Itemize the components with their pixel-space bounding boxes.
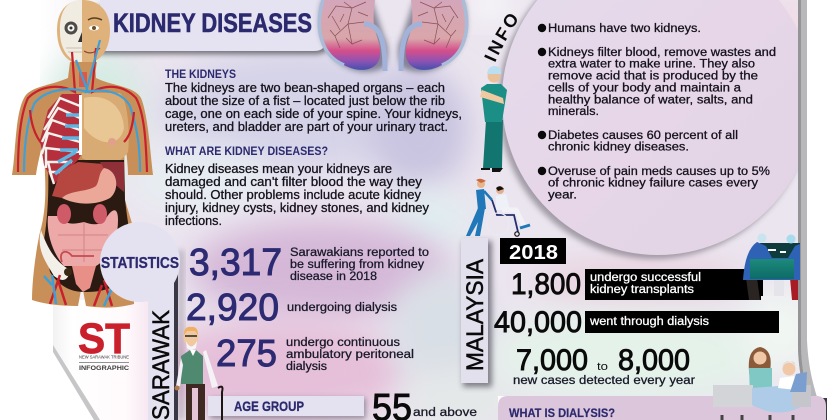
section: the kidneys <box>165 69 462 134</box>
label: sarawak: SARAWAK <box>148 310 175 420</box>
stomach <box>62 168 116 204</box>
section: what are kidney diseases <box>165 146 430 228</box>
stat: 3,317: disease in 2018 <box>290 271 377 283</box>
leg vessels <box>44 275 112 306</box>
icon: nurse with wheelchair <box>466 179 530 236</box>
intestines <box>48 210 118 266</box>
stat: 3,317: 3,317 <box>189 242 282 284</box>
figure: human anatomy body <box>12 0 153 308</box>
stat: 55 and above <box>372 387 477 420</box>
stat: 2,920: 2,920 <box>186 287 279 329</box>
info bullet list: Kidneys filter blood, remove wastes and <box>548 47 776 59</box>
info bullet list: healthy balance of water, salts, and <box>548 94 753 106</box>
stat: 2,920: undergoing dialysis <box>287 302 397 314</box>
stat: 1,800 transplants: 1,800 <box>511 268 581 301</box>
info bullet list <box>538 23 776 202</box>
page edge strip <box>798 0 818 400</box>
info bullet list: cells of your body and maintain a <box>548 82 742 94</box>
section: what are kidney diseases: Kidney diseases mean your kidneys are <box>165 162 392 176</box>
heading: info: O <box>498 9 523 32</box>
pelvis <box>40 230 70 280</box>
panel: malaysia <box>461 238 492 387</box>
heading: info: I <box>480 52 501 65</box>
panel: statistics <box>100 222 184 420</box>
abdomen cavity <box>44 160 130 292</box>
icon: nurse and patient in bed <box>713 347 811 420</box>
stat: 40,000 dialysis: went through dialysis <box>589 316 709 328</box>
stat: 3,317: Sarawakians reported to <box>290 247 429 259</box>
stat: 55 and above: and above <box>413 407 477 419</box>
liver <box>52 162 104 198</box>
title banner <box>98 0 328 54</box>
label: 2018: 2018 <box>509 242 558 264</box>
label: 2018 <box>500 238 566 264</box>
icon: surgeons at operating table <box>743 234 800 300</box>
section: the kidneys: THE KIDNEYS <box>165 69 236 81</box>
section: what are kidney diseases: should. Other problems include acute kidney <box>165 188 422 202</box>
stat: new cases: to <box>597 361 608 373</box>
stat: new cases: 8,000 <box>618 344 690 377</box>
section: the kidneys: The kidneys are two bean-shaped organs – each <box>165 81 445 95</box>
info bullet list: extra water to make urine. They also <box>548 58 755 70</box>
panel: age group <box>208 396 366 419</box>
panel: info circle <box>498 0 814 259</box>
icon: old man with cane <box>174 327 222 420</box>
info bullet list: Diabetes causes 60 percent of all <box>548 130 738 142</box>
section: what are kidney diseases: damaged and can't filter blood the way they <box>165 175 423 189</box>
section: the kidneys: about the size of a fist – located just below the rib <box>165 94 445 108</box>
skin silhouette <box>12 62 153 308</box>
logo: ST infographic: ST <box>78 315 130 363</box>
kidneys <box>57 204 71 224</box>
section: what are kidney diseases: WHAT ARE KIDNEY DISEASES? <box>165 146 328 158</box>
heading: statistics: STATISTICS <box>101 255 179 272</box>
icon: doctor <box>480 66 507 172</box>
skull half <box>60 0 82 64</box>
info bullet list: chronic kidney diseases. <box>548 142 689 154</box>
stat: 3,317 <box>189 242 429 284</box>
stat: new cases: 7,000 <box>516 344 588 377</box>
chest skin <box>82 93 129 164</box>
section: the kidneys: ureters, and bladder are part of your urinary tract. <box>165 120 448 134</box>
heading: info: N <box>484 37 508 58</box>
section: what are kidney diseases: injury, kidney cysts, kidney stones, and kidney <box>165 201 430 215</box>
stat: 40,000 dialysis: 40,000 <box>494 306 582 339</box>
icon: kidneys <box>319 0 467 72</box>
info bullet list: Overuse of pain meds causes up to 5% <box>548 166 770 178</box>
info bullet list: remove acid that is produced by the <box>548 70 758 82</box>
panel: what is dialysis <box>498 396 827 420</box>
neck and vessels <box>70 62 97 92</box>
stat: 2,920 <box>186 287 397 329</box>
stat: 275: undergo continuous <box>286 337 400 349</box>
section: what are kidney diseases: infections. <box>165 214 222 228</box>
section: the kidneys: cage, one on each side of your spine. Your kidneys, <box>165 107 462 121</box>
logo: ST infographic: NEW SARAWAK TRIBUNE <box>79 354 129 360</box>
title text: KIDNEY DISEASES <box>113 8 312 38</box>
stat: new cases: new cases detected every year <box>513 375 695 387</box>
stat: 275: dialysis <box>286 361 327 373</box>
heading: info: F <box>491 24 514 44</box>
info bullet list: year. <box>548 190 577 202</box>
heading: info <box>480 9 523 65</box>
stat: 275 <box>216 333 414 375</box>
panel: age group: AGE GROUP <box>234 398 304 414</box>
stat: 1,800 transplants: undergo successful <box>590 272 701 284</box>
info bullet list: minerals. <box>548 106 599 118</box>
stat: 1,800 transplants <box>511 268 763 301</box>
ribcage <box>40 94 81 184</box>
panel: what is dialysis: WHAT IS DIALYSIS? <box>509 406 615 420</box>
head <box>57 0 110 64</box>
info bullet list: of chronic kidney failure cases every <box>548 178 758 190</box>
stat: 1,800 transplants: kidney transplants <box>590 284 694 296</box>
logo: ST infographic: INFOGRAPHIC <box>79 365 129 372</box>
stat: 40,000 dialysis <box>494 306 779 339</box>
panel: malaysia: MALAYSIA <box>462 259 489 371</box>
stat: 3,317: be suffering from kidney <box>290 259 424 271</box>
stat: 275: 275 <box>216 333 277 375</box>
info bullet list: Humans have two kidneys. <box>548 23 701 35</box>
stat: 275: ambulatory peritoneal <box>286 349 414 361</box>
stat: new cases <box>513 344 695 387</box>
